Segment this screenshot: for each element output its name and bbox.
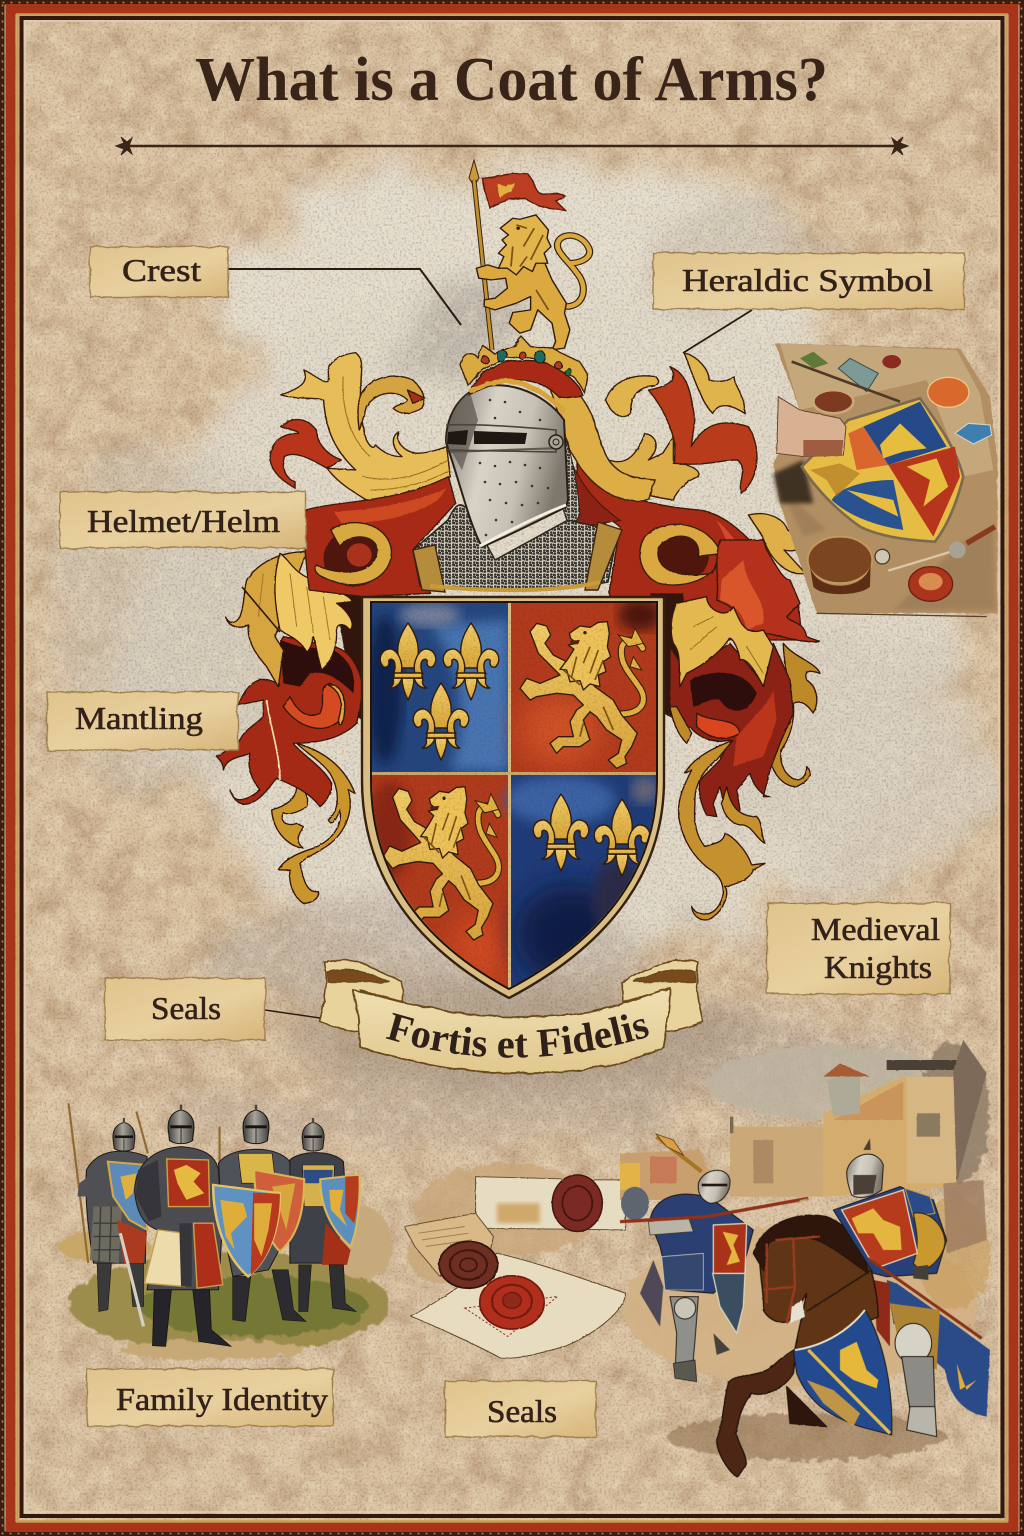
sky and ground wash (623, 1043, 990, 1460)
label: Mantling: Mantling (75, 700, 203, 736)
horse (717, 1215, 878, 1477)
castle (620, 1040, 987, 1253)
knight back left (77, 1118, 147, 1311)
left scroll (324, 530, 384, 587)
label: Seals (lower): Seals (487, 1393, 557, 1429)
red fold (577, 443, 802, 640)
quarter: blue with two fleurs (505, 775, 661, 1000)
right gold plume (684, 353, 745, 413)
motto ribbon (318, 958, 704, 1076)
horse caparison (793, 1310, 892, 1435)
shields (213, 1170, 360, 1276)
painter's board (773, 343, 997, 613)
right gold arm (606, 376, 659, 417)
quarter: red with lion (368, 775, 510, 1000)
quarter: blue with three fleurs (367, 600, 509, 773)
paint pots and seals (808, 537, 872, 583)
illustration: wax seals and parchments (404, 1163, 625, 1358)
mantling: right red fold and scroll (577, 443, 806, 640)
crest lion with banner (469, 160, 590, 350)
label: Heraldic Symbol (653, 253, 964, 309)
lower parchment (411, 1253, 625, 1358)
right gold base leaf (606, 433, 699, 500)
ribbon band (353, 988, 670, 1073)
left big red fold (304, 477, 456, 597)
steel great helm (446, 385, 568, 547)
gold leaf by painting panel (748, 514, 806, 574)
label: Seals (lower) (445, 1381, 596, 1437)
crown with gems (460, 337, 588, 412)
grass ground (58, 1207, 392, 1360)
mantling: crown plumes and left fold (270, 353, 757, 597)
right scroll (652, 528, 709, 582)
label: Seals (upper) (105, 978, 265, 1040)
painted shield (802, 398, 963, 542)
knight middle (219, 1105, 306, 1321)
label: Heraldic Symbol: Heraldic Symbol (682, 262, 933, 298)
letter scroll (404, 1213, 493, 1276)
rider (833, 1138, 982, 1437)
left red leaf (270, 420, 341, 488)
tan wash (408, 1163, 600, 1283)
right red plume (648, 367, 757, 493)
banner pole (469, 160, 492, 350)
motto ribbon: Fortis et Fidelis (386, 1012, 649, 1058)
mantling: lower left foliage (217, 552, 373, 903)
back spears (69, 1103, 220, 1263)
title divider with star ends (116, 137, 908, 155)
strap cloth (545, 372, 655, 530)
wax seal: brown (439, 1242, 498, 1288)
rider cape behind horse (873, 1280, 990, 1417)
gold lion (476, 215, 590, 350)
wax seal: dark upper (552, 1175, 602, 1232)
label: Crest: Crest (122, 252, 201, 288)
helmet and crown (413, 337, 655, 592)
label: Mantling (47, 692, 238, 750)
shield: quartered arms (360, 590, 670, 1010)
chainmail coif (413, 420, 622, 592)
label: Family Identity: Family Identity (116, 1381, 328, 1417)
ribbon tails (320, 960, 703, 1032)
mantling: lower right foliage (650, 540, 820, 920)
foot knight (620, 1134, 812, 1382)
left gold plume (281, 353, 450, 500)
illustration: jousting knights at a castle (620, 1040, 990, 1477)
label: Helmet/Helm: Helmet/Helm (87, 503, 280, 539)
knight right (290, 1118, 356, 1311)
quarter: red with lion (510, 599, 662, 773)
motto text (385, 1036, 650, 1058)
label: Helmet/Helm (60, 492, 306, 548)
label: Medieval Knights: Medieval (811, 911, 940, 947)
knight front (120, 1105, 231, 1346)
label: Medieval Knights: Knights (824, 949, 932, 985)
illustration: painting a shield on a board (773, 343, 997, 617)
label: Seals (upper): Seals (151, 990, 221, 1026)
red flag (482, 173, 565, 210)
label: Crest (90, 247, 228, 297)
leader lines (228, 269, 752, 1018)
title: What is a Coat of Arms? (195, 46, 828, 114)
illustration: family of knights (58, 1103, 392, 1360)
upper parchment (476, 1177, 625, 1230)
label: Medieval Knights (767, 903, 950, 994)
wax seal: red rose (480, 1276, 544, 1329)
painter's hand (777, 397, 846, 457)
label: Family Identity (87, 1369, 333, 1426)
